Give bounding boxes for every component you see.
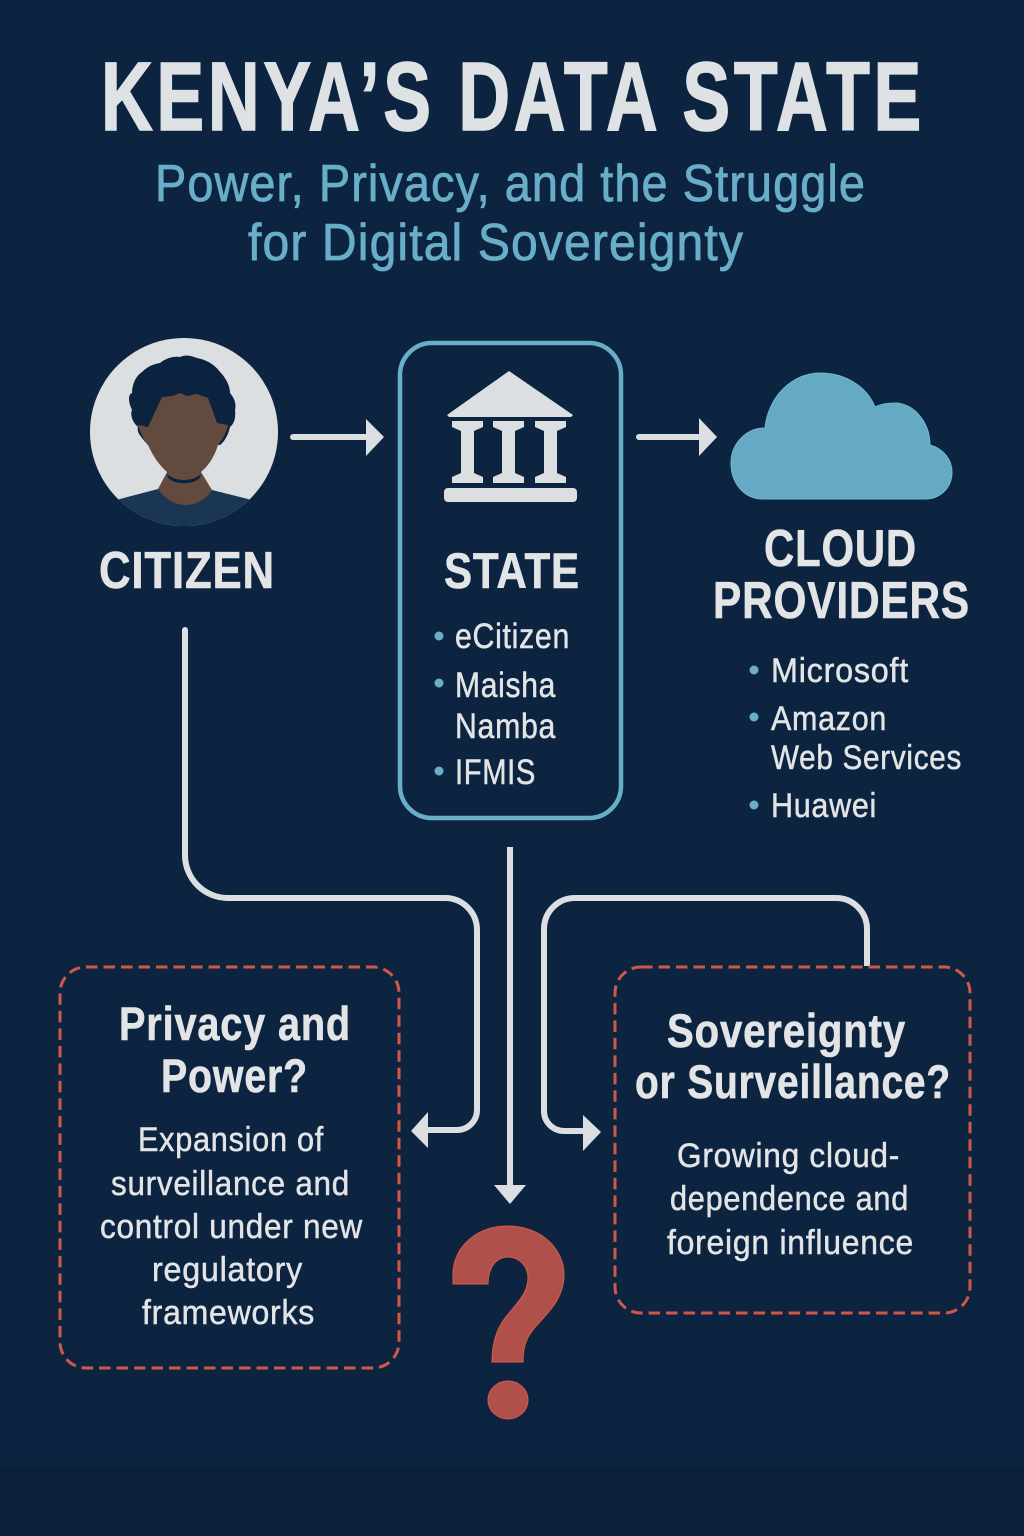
list: cloud providers bbox=[750, 652, 962, 825]
hair bbox=[129, 355, 235, 445]
infographic canvas bbox=[58, 61, 972, 1420]
text: sovereignty description: foreign influence bbox=[667, 1224, 914, 1262]
shirt bbox=[118, 489, 250, 526]
list: state systems: eCitizen bbox=[455, 617, 570, 656]
panel: sovereignty or surveillance bbox=[615, 967, 970, 1313]
list: state systems: Namba bbox=[455, 707, 556, 746]
heading: sovereignty or surveillance: Sovereignty bbox=[667, 1004, 906, 1057]
heading: privacy and power: Power? bbox=[161, 1049, 308, 1102]
arrow: state to question mark bbox=[494, 847, 526, 1204]
text: privacy description bbox=[100, 1121, 363, 1332]
face bbox=[138, 393, 228, 479]
text: sovereignty description: Growing cloud- bbox=[677, 1137, 900, 1175]
label: citizen: CITIZEN bbox=[99, 542, 275, 600]
text: privacy description: surveillance and bbox=[111, 1165, 350, 1203]
neck shadow bbox=[167, 474, 201, 483]
arrow: citizen to privacy panel bbox=[185, 630, 477, 1148]
text: privacy description: Expansion of bbox=[138, 1121, 324, 1159]
list: cloud providers: Huawei bbox=[771, 787, 877, 825]
icon: question mark bbox=[453, 1226, 564, 1419]
arrow: citizen to state bbox=[290, 419, 384, 456]
arrow: cloud to sovereignty panel bbox=[544, 898, 867, 1151]
heading: sovereignty or surveillance bbox=[635, 1004, 951, 1108]
label: cloud providers: PROVIDERS bbox=[713, 572, 970, 630]
subtitle bbox=[155, 155, 866, 272]
text: sovereignty description bbox=[667, 1137, 914, 1262]
list: state systems: IFMIS bbox=[455, 753, 536, 792]
text: sovereignty description: dependence and bbox=[670, 1180, 909, 1218]
list: cloud providers: Web Services bbox=[771, 739, 962, 777]
panel: privacy and power bbox=[60, 967, 399, 1368]
subtitle: Power, Privacy, and the Struggle bbox=[155, 155, 866, 213]
text: privacy description: control under new bbox=[100, 1208, 363, 1246]
icon: government building bbox=[444, 371, 577, 502]
subtitle: for Digital Sovereignty bbox=[248, 214, 744, 272]
heading: privacy and power bbox=[119, 997, 351, 1102]
list: cloud providers: Microsoft bbox=[771, 652, 909, 690]
list: state systems bbox=[434, 617, 570, 792]
label: state: STATE bbox=[444, 543, 580, 599]
heading: sovereignty or surveillance: or Surveillance? bbox=[635, 1055, 951, 1108]
arrow: state to cloud bbox=[636, 418, 717, 456]
text: privacy description: frameworks bbox=[142, 1294, 315, 1332]
icon: cloud bbox=[731, 373, 952, 499]
label: cloud providers: CLOUD bbox=[764, 520, 917, 578]
list: cloud providers: Amazon bbox=[771, 700, 887, 738]
label: cloud providers bbox=[713, 520, 970, 630]
heading: privacy and power: Privacy and bbox=[119, 997, 351, 1050]
icon: citizen bbox=[90, 338, 278, 540]
neck bbox=[158, 472, 212, 505]
list: state systems: Maisha bbox=[455, 666, 556, 705]
panel: state bbox=[400, 343, 621, 818]
text: privacy description: regulatory bbox=[152, 1251, 303, 1289]
